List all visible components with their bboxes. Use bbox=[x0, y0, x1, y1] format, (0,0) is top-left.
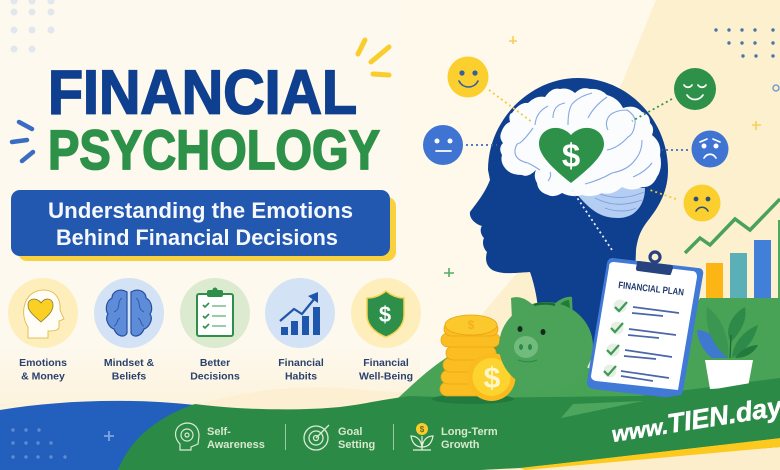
yellow sparkle strokes bbox=[358, 40, 389, 75]
cerebellum bbox=[575, 185, 645, 218]
beige background panel bbox=[417, 0, 780, 420]
clipboard: financial plan bbox=[587, 252, 703, 399]
blue sparkle strokes bbox=[12, 122, 33, 161]
chart background green bbox=[690, 298, 780, 390]
label: Habits bbox=[285, 370, 317, 382]
coin stack bbox=[432, 315, 516, 404]
icon: target with arrow bbox=[304, 425, 329, 450]
icon: head with target bbox=[176, 423, 199, 450]
emoji: calm green bbox=[674, 68, 716, 110]
label: Goal bbox=[338, 426, 362, 438]
dots and plus on blue wave bbox=[11, 428, 114, 459]
icon: sprout with coin: $ bbox=[420, 425, 425, 434]
benefit: Goal Setting bbox=[304, 425, 375, 451]
beige wave behind bottom band bbox=[195, 387, 417, 420]
feature: Financial Well-Being bbox=[351, 278, 421, 382]
coin stack: $ bbox=[468, 318, 475, 332]
feature: Mindset & Beliefs bbox=[94, 278, 164, 382]
label: Decisions bbox=[190, 370, 240, 382]
divider bbox=[393, 424, 394, 450]
icon: brain bbox=[106, 290, 152, 336]
icon: shield with dollar: $ bbox=[379, 302, 391, 327]
label: Emotions bbox=[19, 357, 67, 369]
label: Long-Term bbox=[441, 426, 498, 438]
head silhouette bbox=[470, 78, 668, 360]
label: Self- bbox=[207, 426, 231, 438]
website url: www.TIEN.day bbox=[609, 391, 780, 448]
divider bbox=[285, 424, 286, 450]
benefit: Long-Term Growth bbox=[411, 423, 498, 451]
subtitle line 1: Understanding the Emotions bbox=[48, 198, 353, 223]
feature: Better Decisions bbox=[180, 278, 250, 382]
coin stack: $ bbox=[484, 362, 501, 395]
feature: Financial Habits bbox=[265, 278, 335, 382]
growth arrow line bbox=[685, 199, 780, 253]
checklist items bbox=[604, 300, 679, 381]
title line: FINANCIAL: FINANCIAL bbox=[48, 58, 357, 128]
bottom blue wave bbox=[0, 401, 195, 470]
piggy bank bbox=[499, 297, 593, 395]
light wedge on green bbox=[547, 401, 643, 434]
emoji: worried blue bbox=[692, 130, 728, 168]
subtitle line 2: Behind Financial Decisions bbox=[56, 225, 338, 250]
dot pattern top right bbox=[714, 28, 775, 58]
brain bbox=[500, 88, 661, 196]
icon: checklist clipboard bbox=[197, 288, 233, 336]
benefit: Self-Awareness bbox=[176, 423, 265, 451]
label: Setting bbox=[338, 439, 375, 451]
growth bar chart bbox=[685, 199, 780, 298]
label: Better bbox=[200, 357, 230, 369]
decorative plus signs and ring bbox=[444, 36, 779, 277]
emoji: sad yellow bbox=[684, 184, 720, 222]
dot pattern top left bbox=[10, 0, 54, 52]
icon: rising bars and arrow bbox=[280, 292, 320, 335]
heart with dollar sign: $ bbox=[562, 137, 580, 174]
label: Growth bbox=[441, 439, 480, 451]
title line: PSYCHOLOGY: PSYCHOLOGY bbox=[48, 118, 380, 181]
subtitle banner bbox=[11, 190, 396, 261]
dotted connector lines bbox=[466, 90, 688, 250]
label: Awareness bbox=[207, 439, 265, 451]
bottom green wave bbox=[118, 378, 780, 470]
label: & Money bbox=[21, 370, 65, 382]
label: Financial bbox=[363, 357, 409, 369]
label: Well-Being bbox=[359, 370, 413, 382]
feature: Emotions & Money bbox=[8, 278, 78, 382]
emoji: happy yellow bbox=[448, 56, 488, 98]
clipboard heading: FINANCIAL PLAN bbox=[618, 280, 685, 298]
icon: head with heart bbox=[24, 290, 64, 338]
label: Beliefs bbox=[112, 370, 146, 382]
pot bbox=[705, 360, 753, 389]
potted plant bbox=[697, 307, 758, 389]
title: Financial Psychology bbox=[48, 58, 380, 181]
green hill bbox=[398, 298, 780, 412]
website ribbon bbox=[400, 378, 780, 470]
label: Mindset & bbox=[104, 357, 154, 369]
heart with dollar sign bbox=[539, 128, 604, 183]
label: Financial bbox=[278, 357, 324, 369]
emoji: neutral blue bbox=[423, 125, 463, 165]
